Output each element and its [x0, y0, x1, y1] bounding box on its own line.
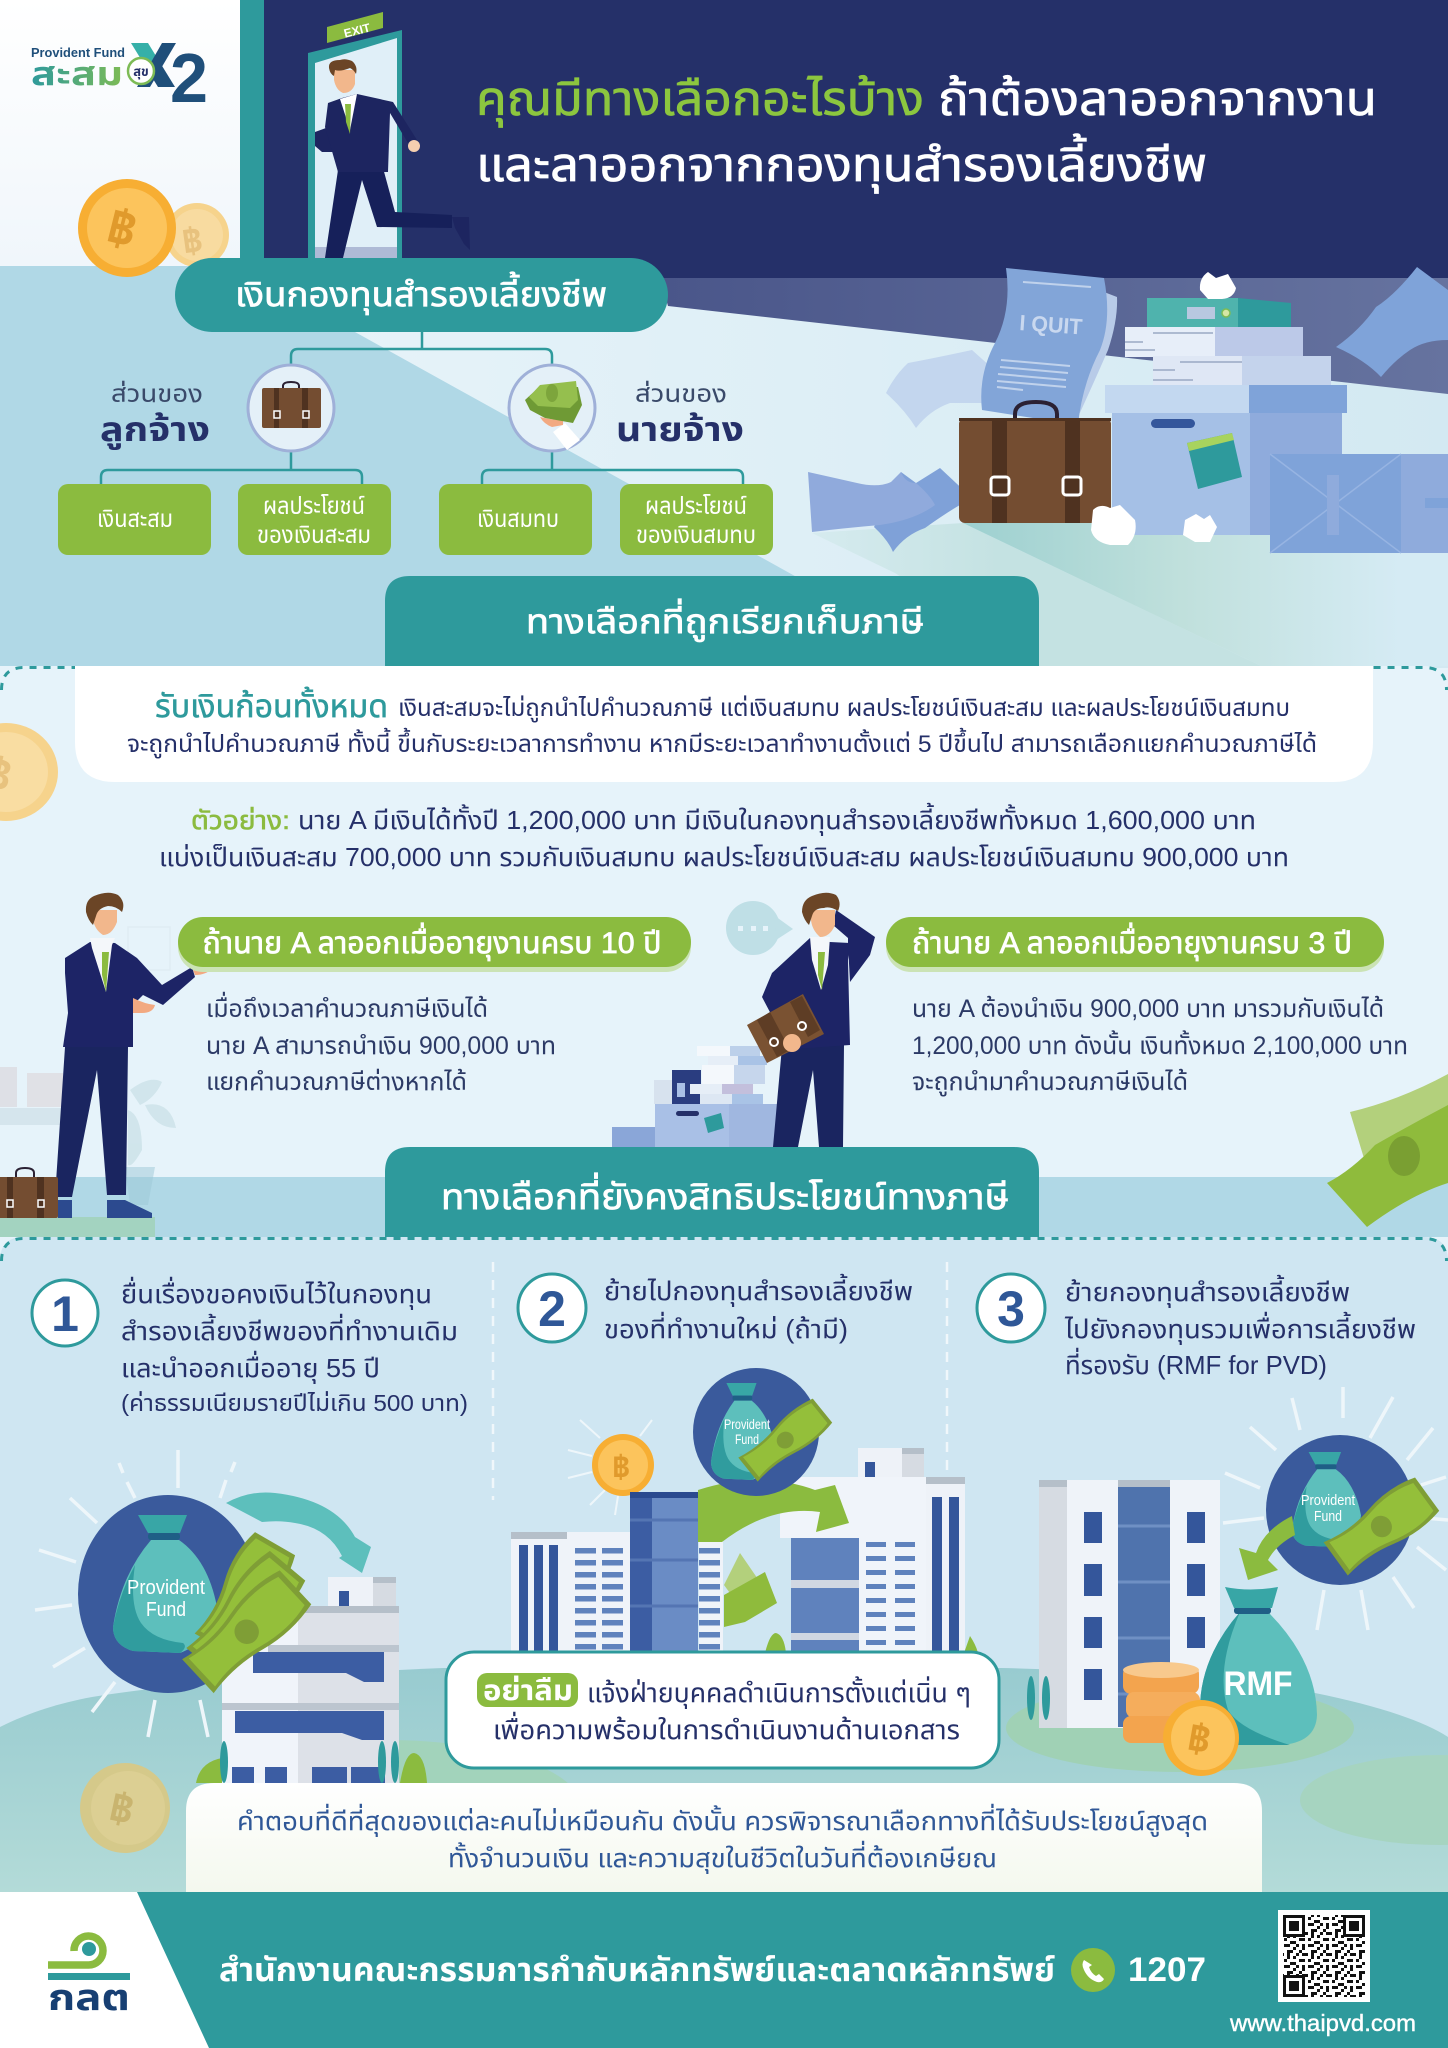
- option 2 text: [604, 1273, 913, 1344]
- text: example: ตัวอย่าง:: [191, 805, 290, 835]
- logo: Provident Fund x2: 2: [170, 39, 208, 117]
- ground hills: [0, 1668, 1448, 1892]
- employee side: [100, 365, 334, 451]
- title: ถ้าต้องลาออกจากงาน: [938, 72, 1377, 125]
- paper stack on cabinet: [612, 1046, 777, 1147]
- box: contribution benefits: ผลประโยชน์: [645, 493, 747, 520]
- green pill: ten years: ถ้านาย A ลาออกเมื่ออายุงานครบ 10 ปี: [202, 922, 662, 961]
- big box: [1105, 385, 1347, 535]
- coin: [1163, 1700, 1239, 1776]
- icon: cash in hand: [509, 365, 595, 451]
- tab: taxed option: [385, 576, 1039, 666]
- band between panels: [0, 1177, 1448, 1237]
- option 3 text: ย้ายกองทุนสำรองเลี้ยงชีพ: [1065, 1274, 1350, 1308]
- employer side: นายจ้าง: [616, 411, 744, 449]
- number 2 badge: [518, 1274, 586, 1342]
- dashed edge panel one: [2, 668, 1446, 690]
- title: [476, 72, 1377, 193]
- box: savings: [58, 484, 211, 555]
- logo: SEC: [48, 1936, 130, 2018]
- panel: tax-benefit options background: [0, 1237, 1448, 1892]
- coin stack: [1123, 1662, 1200, 1743]
- green pill: three years: ถ้านาย A ลาออกเมื่ออายุงานครบ 3 ปี: [912, 922, 1352, 961]
- closing card: คำตอบที่ดีที่สุดของแต่ละคนไม่เหมือนกัน ดังนั้น ควรพิจารณาเลือกทางที่ได้รับประโยชน์สูงสุด: [237, 1803, 1208, 1837]
- option 2: [511, 1273, 978, 1653]
- box: savings: เงินสะสม: [97, 506, 173, 533]
- green pill: three years: [886, 917, 1384, 972]
- employee side: ลูกจ้าง: [100, 411, 210, 450]
- tab: tax-benefit options: ทางเลือกที่ยังคงสิทธิประโยชน์ทางภาษี: [441, 1172, 1009, 1217]
- option 1 text: ยื่นเรื่องขอคงเงินไว้ในกองทุน: [121, 1276, 432, 1310]
- icon: sun rays: [35, 1450, 235, 1737]
- cash stack: [180, 1530, 314, 1697]
- option 2 text: ของที่ทำงานใหม่ (ถ้ามี): [604, 1311, 848, 1344]
- bushes: [196, 1741, 427, 1783]
- number 2 badge: 2: [538, 1281, 566, 1337]
- man pointing, ten years: [55, 893, 213, 1218]
- callout: do not forget: แจ้งฝ่ายบุคคลดำเนินการตั้งแต่เนิ่น ๆ: [587, 1676, 971, 1709]
- option 3 text: [1064, 1274, 1416, 1380]
- box: contribution benefits: ของเงินสมทบ: [636, 522, 756, 549]
- slate wall band: [660, 278, 1448, 394]
- footer: [0, 1892, 1448, 2048]
- QR code: [1278, 1910, 1370, 2002]
- option 1 text: (ค่าธรรมเนียมรายปีไม่เกิน 500 บาท): [121, 1390, 468, 1416]
- money bag circle: Fund: [146, 1599, 186, 1621]
- text: three years: จะถูกนำมาคำนวณภาษีเงินได้: [912, 1068, 1188, 1097]
- icon: briefcase: [248, 365, 334, 451]
- front box: [1270, 454, 1448, 553]
- money bag circle: [78, 1495, 258, 1693]
- man thinking, three years: [747, 893, 875, 1147]
- logo: Provident Fund x2: สะสม: [31, 55, 123, 92]
- panel: taxed option background: [0, 666, 1448, 1177]
- box: savings benefits: ผลประโยชน์: [263, 493, 365, 520]
- sun rays: [1223, 1387, 1448, 1630]
- money bag circle small: Fund: [735, 1431, 759, 1447]
- building: [222, 1577, 399, 1783]
- white card: lump sum: [75, 666, 1373, 782]
- option 1 text: สำรองเลี้ยงชีพของที่ทำงานเดิม: [121, 1313, 458, 1346]
- text: ten years: เมื่อถึงเวลาคำนวณภาษีเงินได้: [206, 991, 488, 1023]
- text: three years: 1,200,000 บาท ดังนั้น เงินทั้งหมด 2,100,000 บาท: [912, 1029, 1408, 1060]
- green pill: ten years: [178, 917, 691, 972]
- right building: [780, 1448, 965, 1652]
- text: three years: [912, 995, 1408, 1097]
- flying paper right: [1336, 267, 1448, 377]
- number 1 badge: [32, 1280, 98, 1346]
- text: lump sum explanation: จะถูกนำไปคำนวณภาษี ทั้งนี้ ขึ้นกับระยะเวลาการทำงาน หากมีระยะเวลาทำงานตั้งแต่ 5 ปีขึ้นไป สามารถเลือกแยกคำนวณภาษีได้: [127, 727, 1317, 759]
- partial cash: [724, 1553, 777, 1627]
- text: ten years: แยกคำนวณภาษีต่างหากได้: [206, 1068, 467, 1096]
- option 3 text: ที่รองรับ (RMF for PVD): [1065, 1347, 1327, 1380]
- coin: [592, 1434, 654, 1496]
- logo: Provident Fund x2: สุข: [133, 64, 149, 79]
- option 1 text: และนำออกเมื่ออายุ 55 ปี: [121, 1350, 380, 1384]
- exit door with running man: EXIT: [342, 20, 372, 41]
- briefcase: [959, 402, 1111, 523]
- navy header: [264, 0, 1448, 278]
- icon: faded coin lower left: ฿: [105, 1783, 139, 1834]
- box: savings benefits: [238, 484, 391, 555]
- number 1 badge: 1: [51, 1286, 79, 1342]
- column dividers: [493, 1262, 947, 1500]
- callout: do not forget: อย่าลืม: [483, 1675, 573, 1706]
- box: contributions: เงินสมทบ: [477, 506, 559, 533]
- employer side: [509, 365, 744, 451]
- callout: do not forget: [446, 1652, 999, 1768]
- option 1 text: [121, 1276, 468, 1416]
- icon: gold coins top left: ฿: [101, 198, 143, 260]
- left buildings: [511, 1492, 723, 1652]
- number 3 badge: [977, 1274, 1045, 1342]
- icon: briefcase on floor: [0, 1168, 58, 1218]
- employee side: ส่วนของ: [111, 380, 203, 408]
- money bag circle small: Provident: [724, 1416, 770, 1432]
- option 1: [32, 1276, 468, 1783]
- white header corner: [0, 0, 240, 266]
- option 2 text: ย้ายไปกองทุนสำรองเลี้ยงชีพ: [604, 1273, 913, 1307]
- green arrow: [698, 1480, 849, 1542]
- tab: tax-benefit options: [385, 1147, 1039, 1237]
- money bag circle: Fund: [1314, 1508, 1342, 1525]
- money bag circle small: [693, 1368, 834, 1496]
- resignation letter: I QUIT: [1019, 310, 1084, 339]
- icon: phone: [1071, 1948, 1115, 1992]
- RMF bag: [1200, 1587, 1317, 1745]
- money bag circle: [1266, 1435, 1441, 1585]
- money bag circle: Provident: [127, 1577, 205, 1599]
- text: three years: นาย A ต้องนำเงิน 900,000 บาท มารวมกับเงินได้: [912, 995, 1384, 1023]
- title: และลาออกจากกองทุนสำรองเลี้ยงชีพ: [476, 133, 1207, 193]
- text: lump sum explanation: รับเงินก้อนทั้งหมด: [155, 686, 388, 724]
- tab: taxed option: ทางเลือกที่ถูกเรียกเก็บภาษี: [526, 598, 924, 642]
- org tree connectors: [101, 332, 743, 484]
- floor area left blue: [0, 266, 957, 666]
- rays around coin: [568, 1420, 652, 1515]
- floor area right: [340, 278, 1448, 668]
- pill: provident fund heading: [175, 258, 668, 332]
- resignation letter: [981, 268, 1117, 425]
- text: ten years: นาย A สามารถนำเงิน 900,000 บาท: [206, 1032, 556, 1060]
- title: คุณมีทางเลือกอะไรบ้าง: [476, 72, 924, 127]
- icon: faded coin left edge: [0, 723, 58, 821]
- teal stripe: [240, 0, 264, 266]
- box: contributions: [439, 484, 592, 555]
- callout: do not forget: เพื่อความพร้อมในการดำเนินงานด้านเอกสาร: [493, 1711, 960, 1745]
- text: ten years: [206, 991, 556, 1096]
- text: lump sum explanation: [127, 686, 1317, 759]
- flying paper left: [886, 350, 991, 428]
- faint office backdrop: [0, 927, 176, 1205]
- hotline number: 1207: [1128, 1951, 1206, 1989]
- running man: [315, 59, 470, 258]
- icon: gold coins top left: ฿: [179, 219, 206, 263]
- pill: provident fund heading: เงินกองทุนสำรองเลี้ยงชีพ: [235, 271, 607, 315]
- floor patch under man: [0, 1217, 155, 1237]
- text: lump sum explanation: เงินสะสมจะไม่ถูกนำไปคำนวณภาษี แต่เงินสมทบ ผลประโยชน์เงินสะสม และผลประโยชน์เงินสมทบ: [398, 694, 1290, 723]
- green arrow down: [1239, 1516, 1295, 1580]
- number 3 badge: 3: [997, 1281, 1025, 1337]
- text: example: นาย A มีเงินได้ทั้งปี 1,200,000 บาท มีเงินในกองทุนสำรองเลี้ยงชีพทั้งหมด 1,600,000 บาท: [298, 802, 1256, 836]
- floor shadow right: [963, 523, 1448, 666]
- RMF bag: RMF: [1224, 1665, 1292, 1703]
- teal binder: [1147, 298, 1291, 327]
- coin: ฿: [612, 1449, 631, 1485]
- arc arrow: [226, 1492, 371, 1573]
- box: savings benefits: ของเงินสะสม: [257, 522, 371, 549]
- dashed edge panel two: [2, 1238, 1446, 1261]
- website: www.thaipvd.com: [1229, 2010, 1416, 2036]
- closing card: ทั้งจำนวนเงิน และความสุขในชีวิตในวันที่ต้องเกษียณ: [448, 1840, 997, 1874]
- option 3: [977, 1274, 1448, 1776]
- logo: Provident Fund x2: Provident Fund: [31, 45, 125, 60]
- floor shadow left of briefcase: [812, 523, 1261, 666]
- exit door with running man: [308, 12, 470, 258]
- text: example: [159, 802, 1289, 872]
- building: [1027, 1480, 1220, 1728]
- crumpled papers: [1091, 272, 1236, 545]
- coin: ฿: [1184, 1716, 1215, 1763]
- employer side: ส่วนของ: [635, 380, 727, 408]
- stacked papers: [1125, 327, 1331, 385]
- closing card: [186, 1783, 1262, 1892]
- logo: Provident Fund x2: [31, 39, 208, 117]
- falling cash right edge: [1327, 1074, 1448, 1227]
- organisation name: สำนักงานคณะกรรมการกำกับหลักทรัพย์และตลาดหลักทรัพย์: [219, 1951, 1055, 1988]
- speech bubble: [726, 901, 793, 955]
- icon: faded coin lower left: [80, 1763, 170, 1853]
- box: contribution benefits: [620, 484, 773, 555]
- logo: SEC: กลต: [48, 1977, 130, 2018]
- icon: gold coins top left: [78, 179, 229, 277]
- lower left flying paper: [808, 468, 972, 552]
- bushes: [765, 1633, 978, 1653]
- money bag circle: Provident: [1301, 1492, 1356, 1509]
- illustration: I QUIT desk pile: [808, 267, 1448, 553]
- option 3 text: ไปยังกองทุนรวมเพื่อการเลี้ยงชีพ: [1064, 1311, 1416, 1345]
- text: example: แบ่งเป็นเงินสะสม 700,000 บาท รวมกับเงินสมทบ ผลประโยชน์เงินสะสม ผลประโยชน์เงินสมทบ 900,000 บาท: [159, 842, 1289, 872]
